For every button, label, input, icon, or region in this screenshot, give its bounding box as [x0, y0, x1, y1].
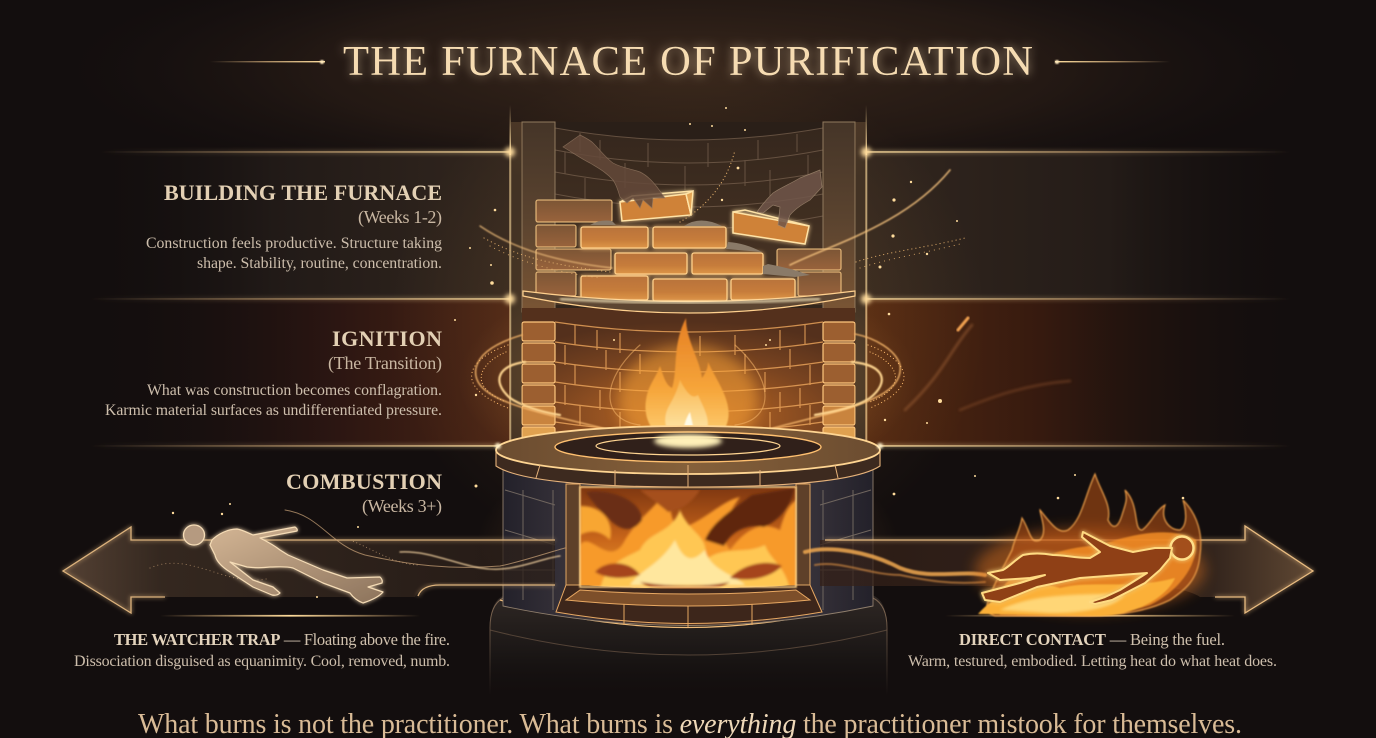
- left text: building the furnace: BUILDING THE FURNACE: [164, 180, 442, 205]
- left text: building the furnace: [146, 180, 442, 272]
- hand: right: [757, 170, 822, 228]
- left text: ignition: [105, 326, 442, 419]
- caption: the watcher trap: [74, 630, 450, 670]
- base fading to black: [490, 595, 887, 705]
- firebox sill: [556, 585, 822, 627]
- particles: [172, 107, 1184, 598]
- caption: the watcher trap: THE WATCHER TRAP — Floating above the fire.: [114, 630, 450, 649]
- left text: building the furnace: shape. Stability, routine, concentration.: [197, 255, 442, 272]
- figure: [982, 532, 1194, 604]
- left text: combustion: COMBUSTION: [286, 469, 442, 494]
- left text: combustion: (Weeks 3+): [362, 496, 442, 517]
- mortar piles: [590, 220, 810, 277]
- left arrow: the watcher: [63, 510, 565, 616]
- flame tongues: [978, 474, 1201, 616]
- ignition flame: [618, 318, 758, 455]
- title: THE FURNACE OF PURIFICATION: [343, 38, 1033, 85]
- firebox surround: [566, 484, 810, 585]
- platform ring: [495, 426, 883, 487]
- section divider lines: [90, 151, 1291, 447]
- left text: ignition: IGNITION: [332, 326, 442, 351]
- firebox flames: [578, 484, 798, 594]
- furnace: upper chamber: [522, 122, 855, 312]
- left and right columns of the upper chamber: [522, 122, 855, 312]
- brick courses: [536, 200, 841, 301]
- hand: left: [563, 135, 665, 208]
- left text: combustion: [286, 469, 442, 517]
- caption: the watcher trap: Dissociation disguised as equanimity. Cool, removed, numb.: [74, 653, 450, 670]
- left text: ignition: (The Transition): [328, 353, 442, 374]
- wisps: [150, 510, 565, 580]
- caption: direct contact: Warm, testured, embodied. Letting heat do what heat does.: [908, 653, 1277, 670]
- left text: ignition: What was construction becomes conflagration.: [147, 382, 442, 399]
- swirling heat trails: [472, 318, 1070, 430]
- furnace: lower brick chamber: [522, 308, 855, 443]
- icon: floating watcher figure: [184, 525, 383, 603]
- lower chamber column bricks: [522, 322, 855, 443]
- caption: direct contact: DIRECT CONTACT — Being the fuel.: [959, 630, 1225, 649]
- heat glow behind furnace: [458, 270, 918, 635]
- left text: ignition: Karmic material surfaces as undifferentiated pressure.: [105, 402, 442, 419]
- left text: building the furnace: (Weeks 1-2): [358, 207, 442, 228]
- shelf: [523, 291, 855, 313]
- vertical light rails: [505, 105, 871, 450]
- furnace body: [490, 465, 887, 705]
- sand swirl around upper chamber: [480, 150, 965, 278]
- held bricks: [620, 191, 809, 244]
- icon: burning figure: [975, 474, 1205, 616]
- caption: direct contact: [908, 630, 1277, 670]
- stone drum: [503, 465, 873, 626]
- right arrow: direct contact: [805, 526, 1313, 616]
- left text: building the furnace: Construction feels productive. Structure taking: [146, 235, 442, 252]
